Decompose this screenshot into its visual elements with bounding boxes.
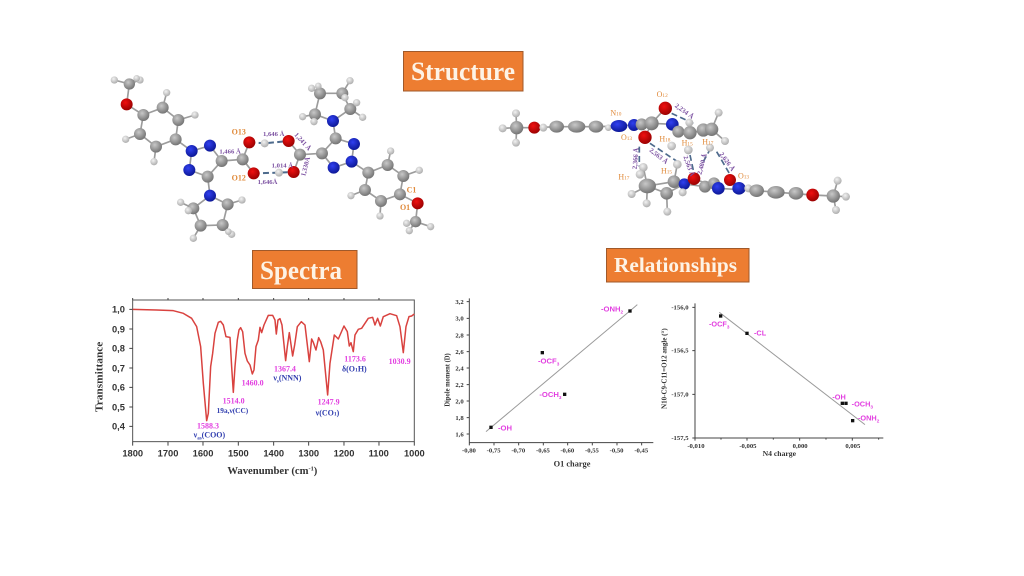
molecule: hydrogen-bonded dimer structure: 1,014 Å [272, 161, 293, 169]
chart: dipole moment vs O1 charge: 3 [559, 395, 562, 400]
chart: dipole moment vs O1 charge: -OCH [539, 390, 559, 399]
molecule: side view with contact distances: H17 [618, 173, 630, 182]
molecule: side view with contact distances: 2,626 Å [718, 151, 737, 173]
chart: dipole moment vs O1 charge: -0,55 [585, 448, 600, 455]
chart: dihedral angle vs N4 charge: N10-C9-C11=O12 angle (°) [660, 328, 669, 409]
molecule: hydrogen-bonded dimer structure: 1,646 Å [263, 130, 285, 138]
heading: Spectra [252, 250, 357, 288]
chart: IR spectrum: 0,7 [112, 363, 125, 373]
molecule: hydrogen-bonded dimer structure: O13 [232, 128, 246, 137]
chart: dihedral angle vs N4 charge: -ONH [858, 414, 877, 423]
chart: dihedral angle vs N4 charge: -CL [754, 328, 767, 337]
chart: dihedral angle vs N4 charge: 3 [727, 324, 730, 329]
chart: IR spectrum: 1200 [334, 449, 354, 459]
chart: IR spectrum: 1100 [369, 449, 389, 459]
chart: dihedral angle vs N4 charge: -157,5 [671, 435, 689, 442]
chart: dipole moment vs O1 charge: -0,80 [462, 448, 477, 455]
chart: IR spectrum: 1588.3 [197, 422, 219, 431]
molecule: side view with contact distances: 2,563 Å [681, 155, 696, 178]
chart: dipole moment vs O1 charge: -0,45 [634, 448, 649, 455]
chart: IR spectrum: (COO) [202, 430, 226, 439]
chart: IR spectrum: 1800 [122, 449, 143, 459]
chart: IR spectrum: ) [314, 466, 318, 477]
chart: dipole moment vs O1 charge: 2 [621, 310, 624, 315]
chart: IR spectrum: 1173.6 [344, 355, 366, 364]
heading: Structure: Structure [411, 57, 515, 86]
chart: IR spectrum: 0,6 [112, 383, 125, 393]
molecule: side view with contact distances: 2,366 Å [631, 147, 641, 169]
chart: IR spectrum: Wavenumber (cm [227, 466, 309, 477]
chart: dihedral angle vs N4 charge: -OCF [709, 319, 727, 328]
chart: IR spectrum: ν [273, 373, 277, 382]
chart: IR spectrum: δ(O1H) [342, 364, 367, 373]
chart: dipole moment vs O1 charge: 2,0 [455, 398, 464, 405]
heading: Spectra: Spectra [260, 256, 342, 285]
chart: dipole moment vs O1 charge: 2,8 [455, 332, 464, 339]
chart: dipole moment vs O1 charge: 2,4 [455, 365, 464, 372]
chart: dipole moment vs O1 charge: -0,50 [610, 448, 624, 455]
chart: IR spectrum: 0,9 [112, 324, 125, 334]
chart: IR spectrum: 1600 [193, 449, 213, 459]
chart: IR spectrum: s [277, 379, 279, 384]
chart: IR spectrum: 0,8 [112, 344, 125, 354]
chart: IR spectrum: 1,0 [112, 305, 125, 315]
chart: dihedral angle vs N4 charge: 3 [870, 404, 873, 409]
heading: Relationships: Relationships [614, 253, 737, 277]
chart: dipole moment vs O1 charge: 3 [557, 362, 560, 367]
chart: IR spectrum: 1300 [298, 449, 319, 459]
chart: IR spectrum: (NNN) [279, 373, 302, 382]
chart: dipole moment vs O1 charge: -0,65 [536, 448, 551, 455]
molecule: hydrogen-bonded dimer structure [111, 75, 434, 242]
chart: dihedral angle vs N4 charge: -156,0 [671, 304, 689, 311]
chart: IR spectrum: 1460.0 [242, 378, 264, 387]
chart: dihedral angle vs N4 charge: -OH [832, 393, 846, 402]
chart: IR spectrum: 0,4 [112, 422, 126, 432]
chart: dipole moment vs O1 charge: -OCF [538, 357, 557, 366]
chart: dihedral angle vs N4 charge: N4 charge [763, 449, 797, 458]
chart: IR spectrum: ν [194, 430, 197, 439]
chart: IR spectrum [93, 298, 425, 477]
chart: dipole moment vs O1 charge: 3,0 [455, 316, 464, 323]
molecule: side view with contact distances: H18 [659, 134, 671, 143]
chart: dihedral angle vs N4 charge: 0,005 [845, 443, 861, 450]
chart: IR spectrum: 1030.9 [389, 357, 411, 366]
molecule: side view with contact distances: H15 [661, 166, 672, 175]
heading: Structure [404, 52, 523, 91]
chart: IR spectrum: 1400 [263, 449, 284, 459]
molecule: side view with contact distances: N10 [610, 108, 622, 117]
chart: dipole moment vs O1 charge: -ONH [601, 305, 621, 314]
chart: IR spectrum: 1700 [158, 449, 178, 459]
chart: IR spectrum: ν(CO1) [315, 408, 340, 417]
chart: dipole moment vs O1 charge: -OH [498, 424, 512, 433]
chart: dihedral angle vs N4 charge: 2 [877, 419, 880, 424]
molecule: side view with contact distances: 2,563 Å [648, 146, 670, 166]
chart: IR spectrum: 1514.0 [223, 396, 245, 405]
chart: dipole moment vs O1 charge [443, 298, 653, 469]
chart: dipole moment vs O1 charge: 1,8 [455, 415, 464, 422]
chart: dihedral angle vs N4 charge: -0,010 [687, 443, 705, 450]
chart: IR spectrum: 0,5 [112, 402, 125, 412]
chart: IR spectrum: 1500 [228, 449, 249, 459]
molecule: hydrogen-bonded dimer structure: O12 [232, 174, 246, 183]
molecule: side view with contact distances: 2,234 Å [673, 102, 695, 121]
molecule: side view with contact distances [499, 90, 850, 216]
heading: Relationships [606, 248, 749, 282]
chart: dihedral angle vs N4 charge: -OCH [852, 399, 870, 408]
chart: dipole moment vs O1 charge: 2,6 [455, 349, 464, 356]
chart: dipole moment vs O1 charge: 2,2 [455, 382, 464, 389]
chart: dihedral angle vs N4 charge: -0,005 [739, 443, 757, 450]
chart: IR spectrum: 19a,ν(CC) [217, 406, 249, 415]
chart: dihedral angle vs N4 charge [660, 303, 883, 458]
molecule: side view with contact distances: O13 [738, 172, 749, 181]
molecule: side view with contact distances: O13 [621, 133, 632, 142]
molecule: hydrogen-bonded dimer structure: C1 [407, 186, 416, 195]
chart: dipole moment vs O1 charge: O1 charge [554, 460, 591, 469]
molecule: hydrogen-bonded dimer structure: 1,330Å [299, 156, 312, 177]
chart: IR spectrum: 1247.9 [318, 398, 340, 407]
molecule: hydrogen-bonded dimer structure: 1,241 Å [292, 131, 313, 152]
chart: dipole moment vs O1 charge: 1,6 [455, 431, 464, 438]
molecule: side view with contact distances: H15 [682, 138, 693, 147]
molecule: hydrogen-bonded dimer structure: O1 [400, 203, 410, 212]
chart: dipole moment vs O1 charge: -0,75 [487, 448, 501, 455]
chart: IR spectrum: Transmittance [93, 342, 105, 412]
molecule: hydrogen-bonded dimer structure: 1,466 Å [219, 148, 241, 156]
chart: dipole moment vs O1 charge: Dipole moment (D) [443, 353, 451, 407]
chart: IR spectrum: as [197, 436, 202, 441]
chart: IR spectrum: -1 [309, 466, 314, 473]
chart: IR spectrum: 1000 [404, 449, 425, 459]
chart: IR spectrum: 1367.4 [274, 364, 296, 373]
chart: dihedral angle vs N4 charge: -156,5 [671, 348, 689, 355]
chart: dipole moment vs O1 charge: -0,60 [560, 448, 575, 455]
molecule: side view with contact distances: H17 [702, 138, 714, 147]
chart: dipole moment vs O1 charge: 3,2 [455, 299, 464, 306]
chart: dihedral angle vs N4 charge: 0,000 [793, 443, 808, 450]
chart: dihedral angle vs N4 charge: -157,0 [671, 391, 689, 398]
molecule: side view with contact distances: O12 [657, 90, 668, 99]
chart: dipole moment vs O1 charge: -0,70 [511, 448, 526, 455]
molecule: side view with contact distances: 2,480 Å [696, 153, 709, 176]
molecule: hydrogen-bonded dimer structure: 1,646Å [258, 178, 278, 186]
